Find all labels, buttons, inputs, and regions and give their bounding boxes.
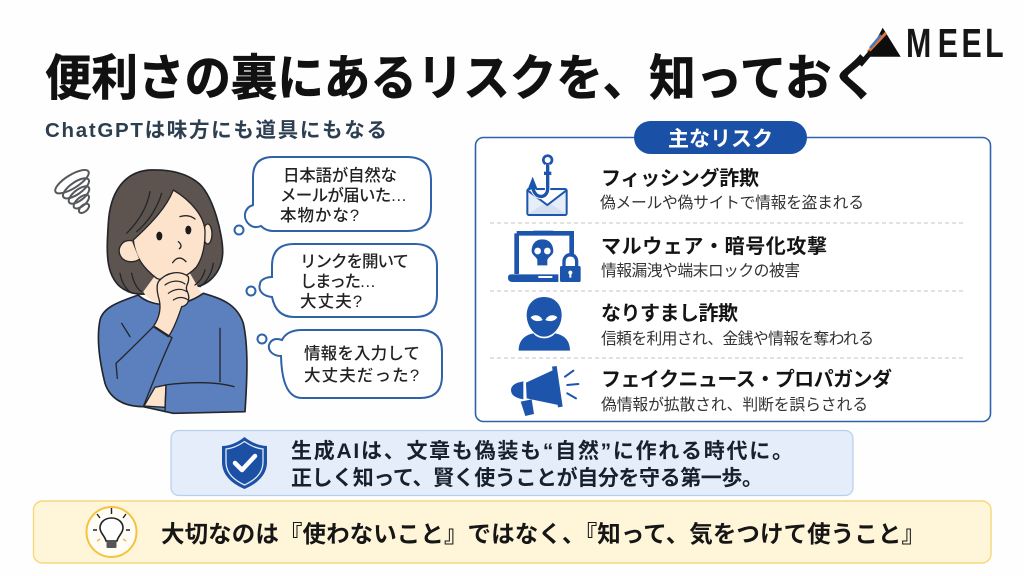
risk 4: fake news [601, 367, 892, 414]
risk 4: fake news: 偽情報が拡散され、判断を誤らされる [601, 396, 868, 414]
icon: shield check [222, 437, 267, 489]
face [133, 190, 205, 280]
logo: AMEEL: MEEL [906, 19, 1004, 66]
brows, nose and mouth [173, 216, 195, 263]
forearm [116, 323, 234, 412]
subtitle: ChatGPTは味方にも道具にもなる [45, 119, 387, 142]
risk 1: phishing: フィッシング詐欺 [601, 166, 759, 190]
hair strands [120, 192, 213, 292]
hair [107, 170, 223, 294]
risk 3: impersonation [601, 302, 874, 348]
risk 2: malware: マルウェア・暗号化攻撃 [601, 235, 827, 258]
speech bubble 1: メールが届いた… [280, 185, 407, 205]
speech bubble 2: リンクを開いて [300, 252, 409, 271]
logo: AMEEL [860, 19, 1004, 66]
callout: generative AI message: 生成AIは、文章も偽装も“自然”に作れる時代に。 [291, 439, 793, 463]
neck [143, 273, 202, 304]
illustration: worried woman [52, 166, 247, 413]
speech bubble 3: 大丈夫だった? [304, 366, 419, 385]
speech bubble 1: 本物かな? [280, 206, 359, 225]
panel: main risks [476, 121, 990, 422]
risk 2: malware [601, 235, 827, 280]
sweater [98, 293, 247, 413]
fingers [165, 281, 188, 300]
risk 1: phishing [600, 166, 864, 212]
risk 3: impersonation: なりすまし詐欺 [601, 302, 738, 325]
callout: key takeaway: 大切なのは『使わないこと』ではなく、『知って、気をつけて使うこと』 [161, 521, 925, 547]
risk 3: impersonation: 信頼を利用され、金銭や情報を奪われる [601, 330, 874, 348]
lower hand [144, 385, 166, 407]
risk 2: malware: 情報漏洩や端末ロックの被害 [601, 262, 800, 280]
icon: phishing hook and envelope [527, 156, 567, 215]
icon: worry squiggle [52, 166, 92, 215]
cuff [155, 327, 172, 338]
risk 4: fake news: フェイクニュース・プロパガンダ [601, 367, 892, 391]
right ear [203, 224, 212, 244]
speech bubble 2: 大丈夫? [300, 292, 362, 311]
icon: light bulb [86, 507, 136, 557]
speech bubble 3: 情報を入力して [304, 344, 420, 363]
icon: malware laptop with skull and lock [508, 231, 581, 282]
speech bubble 1 [234, 157, 431, 234]
hand [153, 273, 189, 337]
icon: masked impersonator [519, 297, 570, 351]
speech bubble 3 [258, 330, 442, 398]
left ear [119, 241, 139, 262]
speech bubble 1: 日本語が自然な [283, 165, 397, 185]
speech bubble 2 [246, 244, 437, 317]
speech bubble 2: しまった… [300, 272, 376, 291]
callout: generative AI message: 正しく知って、賢く使うことが自分を守る第一歩。 [291, 466, 763, 490]
panel heading: main risks [634, 121, 807, 154]
callout: key takeaway [34, 501, 991, 563]
panel heading: main risks: 主なリスク [668, 128, 773, 151]
title: 便利さの裏にあるリスクを、知っておく [45, 52, 878, 106]
risk 1: phishing: 偽メールや偽サイトで情報を盗まれる [600, 194, 864, 212]
eyes [156, 232, 162, 240]
callout: generative AI message [171, 430, 853, 496]
icon: megaphone [511, 366, 578, 416]
